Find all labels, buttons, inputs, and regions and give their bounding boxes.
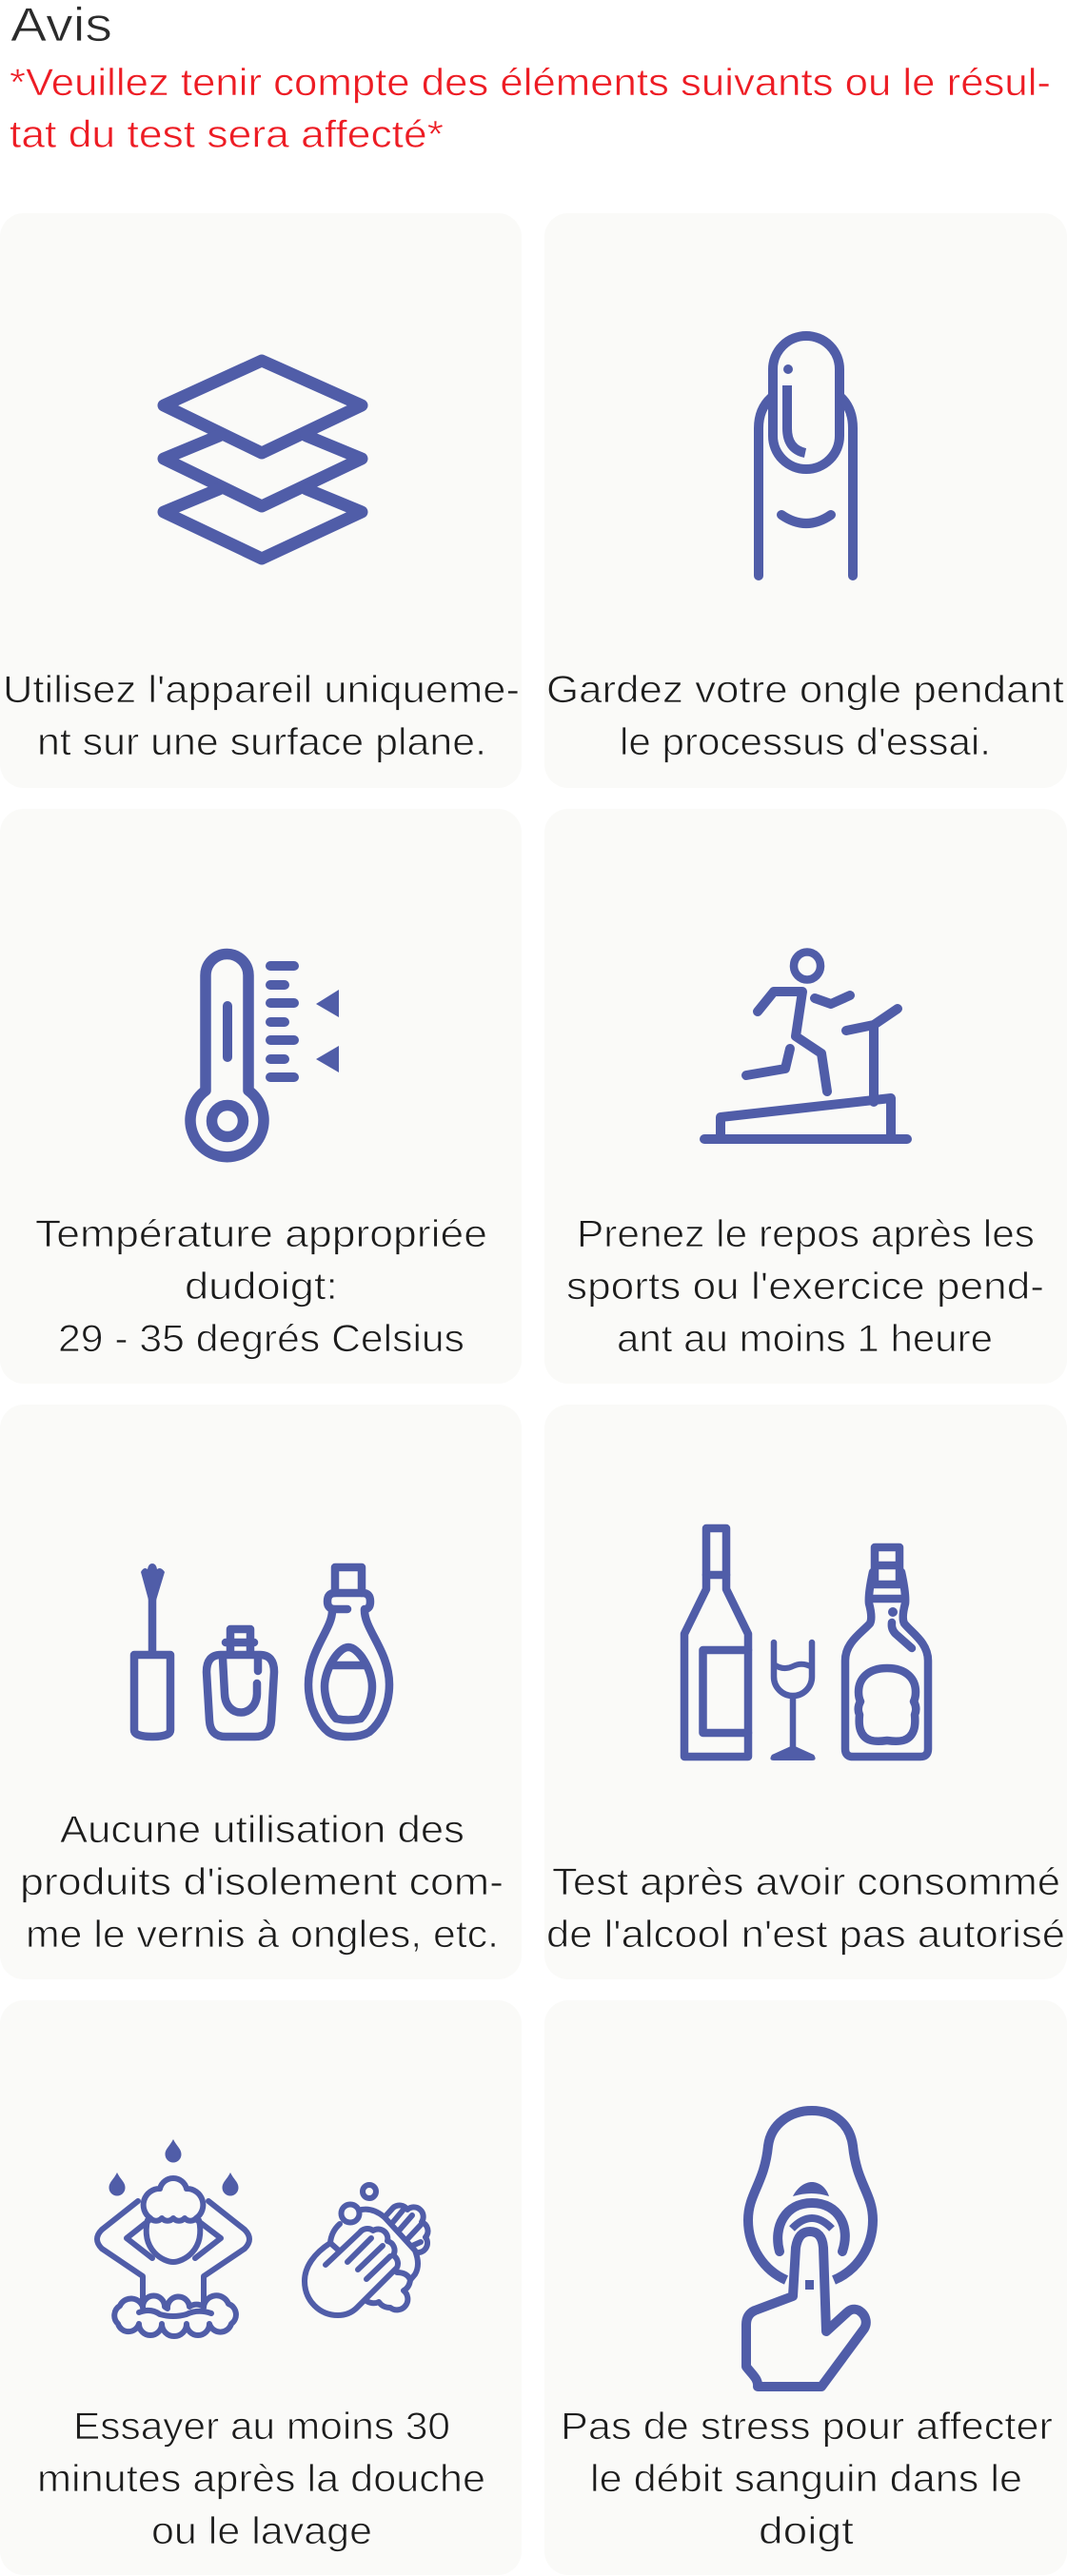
caption: finger temperature: 29 - 35 degrés Celsius xyxy=(58,1318,464,1360)
icon: runner on treadmill xyxy=(704,952,907,1139)
caption: no alcohol: de l'alcool n'est pas autorisé xyxy=(546,1914,1065,1956)
icon: stacked layers xyxy=(164,361,362,559)
icon: finger on sensor xyxy=(746,2111,873,2387)
caption: after shower: minutes après la douche xyxy=(37,2458,485,2500)
panel: no stress xyxy=(544,2000,1067,2575)
caption: no stress: le débit sanguin dans le xyxy=(590,2458,1022,2500)
caption: no stress: Pas de stress pour affecter xyxy=(561,2406,1053,2448)
caption: finger temperature: dudoigt: xyxy=(185,1266,338,1308)
warning text: tat du test sera affecté* xyxy=(10,114,444,156)
caption: no nail polish xyxy=(20,1809,504,1956)
panel: keep fingernail xyxy=(544,213,1067,788)
caption: rest after exercise: sports ou l'exercice pend- xyxy=(566,1266,1044,1308)
panel: flat surface xyxy=(0,213,522,788)
caption: keep fingernail xyxy=(546,669,1064,763)
icon: nail polish products xyxy=(134,1563,389,1737)
caption: no alcohol xyxy=(546,1861,1065,1956)
panel: no nail polish xyxy=(0,1405,522,1979)
caption: no nail polish: me le vernis à ongles, etc. xyxy=(26,1914,499,1956)
icon: bottles and glass xyxy=(684,1528,928,1760)
icon: person showering xyxy=(97,2139,249,2336)
caption: no stress xyxy=(561,2406,1053,2552)
panel: finger temperature xyxy=(0,809,522,1384)
caption: keep fingernail: le processus d'essai. xyxy=(620,721,991,763)
panel: after shower or washing xyxy=(0,2000,522,2575)
icon: thermometer xyxy=(190,954,339,1157)
caption: no nail polish: Aucune utilisation des xyxy=(60,1809,464,1851)
caption: keep fingernail: Gardez votre ongle pendant xyxy=(546,669,1064,711)
caption: finger temperature xyxy=(35,1213,487,1360)
panel: rest after exercise xyxy=(544,809,1067,1384)
caption: rest after exercise xyxy=(566,1213,1044,1360)
caption: after shower: Essayer au moins 30 xyxy=(73,2406,450,2448)
caption: rest after exercise: ant au moins 1 heure xyxy=(617,1318,993,1360)
caption: flat surface xyxy=(3,669,520,763)
caption: no nail polish: produits d'isolement com- xyxy=(20,1861,504,1903)
warning text: *Veuillez tenir compte des éléments suivants ou le résul- xyxy=(10,62,1051,104)
panel: no alcohol xyxy=(544,1405,1067,1979)
caption: after shower: ou le lavage xyxy=(151,2510,372,2552)
caption: after shower xyxy=(37,2406,485,2552)
caption: no alcohol: Test après avoir consommé xyxy=(552,1861,1060,1903)
icon: finger with nail xyxy=(759,336,853,576)
caption: flat surface: nt sur une surface plane. xyxy=(37,721,486,763)
icon: washing hands xyxy=(305,2185,428,2315)
caption: no stress: doigt xyxy=(759,2510,854,2552)
caption: finger temperature: Température appropriée xyxy=(35,1213,487,1255)
caption: flat surface: Utilisez l'appareil uniqueme- xyxy=(3,669,520,711)
caption: rest after exercise: Prenez le repos après les xyxy=(577,1213,1035,1255)
warning text xyxy=(10,62,1051,156)
